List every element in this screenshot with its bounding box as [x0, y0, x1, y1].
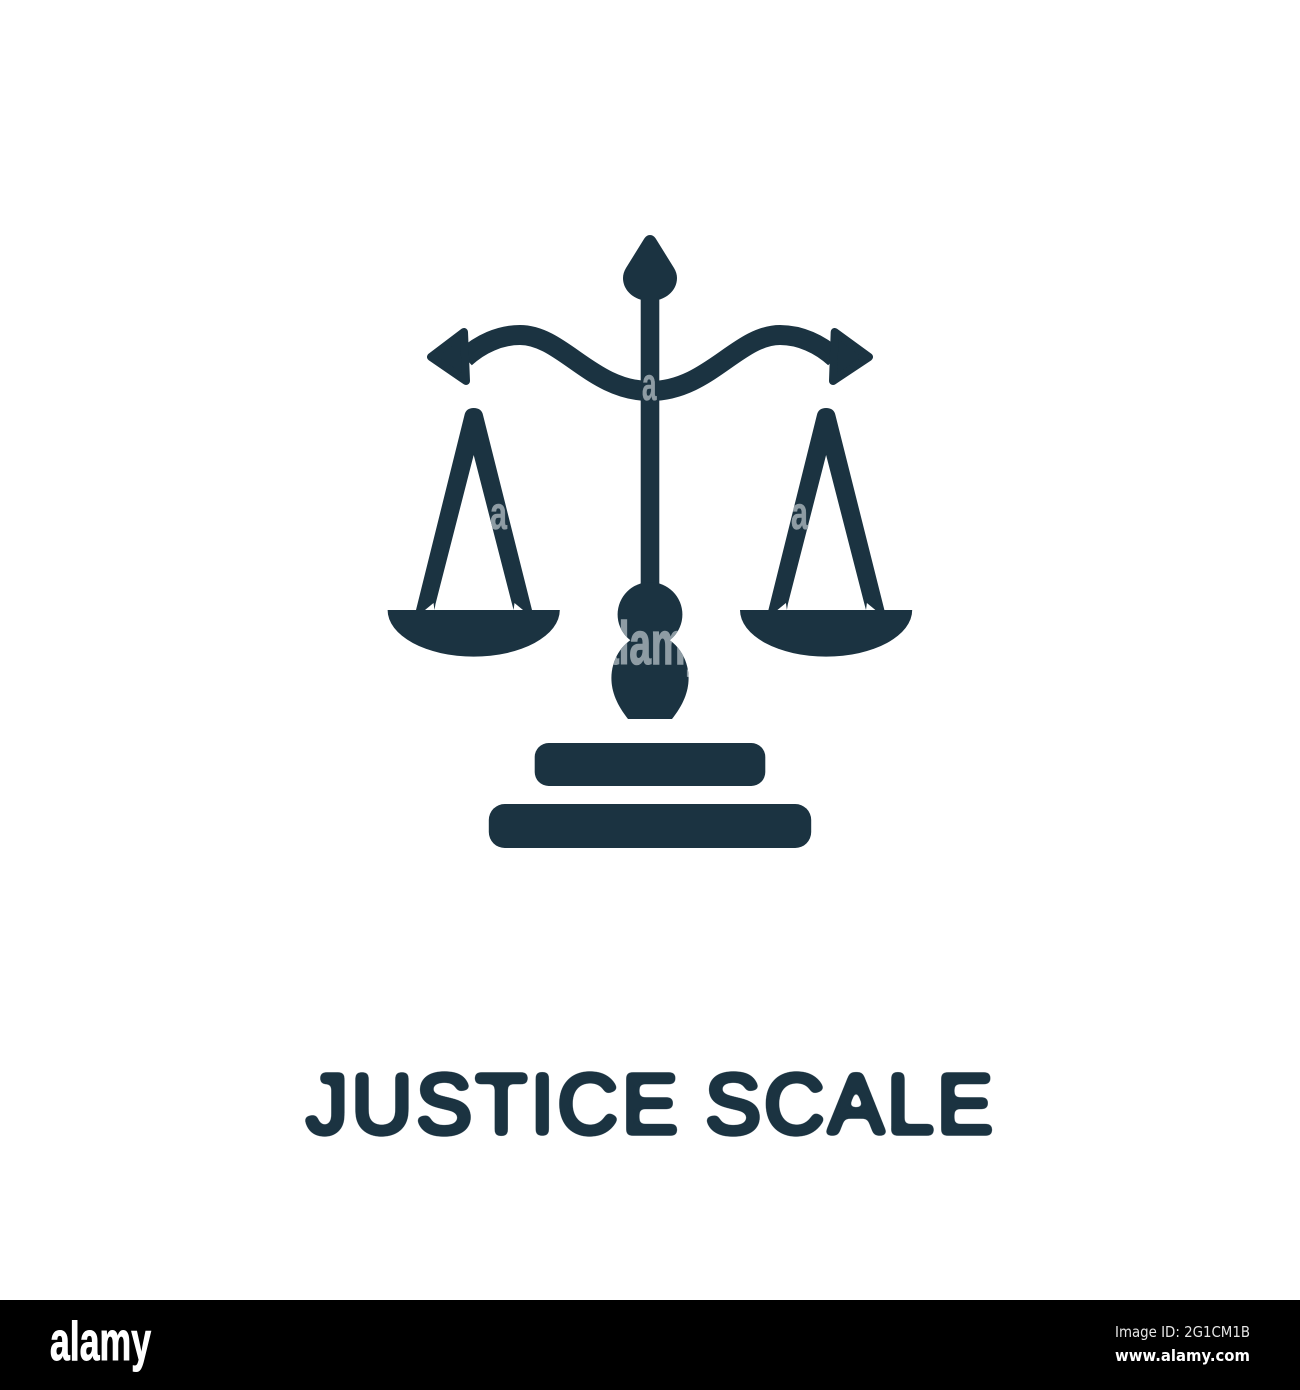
watermark letters over icon: [490, 358, 808, 677]
icon: lower base step: [489, 804, 811, 848]
watermark letters over icon: a: [791, 487, 808, 539]
footer bar: [0, 1300, 1300, 1390]
watermark letters over icon: alamy: [597, 610, 707, 677]
icon: curved balance beam: [465, 335, 835, 391]
title: [306, 1057, 993, 1151]
footer logo: alamy: [50, 1310, 151, 1372]
title: JUSTICE: [306, 1057, 678, 1151]
watermark letters over icon: a: [642, 358, 657, 410]
icon: right scale pan with hanger: [740, 408, 912, 657]
icon: central pole with spear tip: [623, 235, 677, 590]
footer image id: Image ID: 2G1CM1B: [1115, 1323, 1250, 1341]
icon: pole base knob: [611, 582, 689, 719]
icon: left scale pan with hanger: [388, 408, 560, 657]
arrow: right beam end: [833, 332, 869, 381]
arrow: left beam end: [431, 332, 466, 381]
watermark letters over icon: a: [490, 487, 507, 539]
icon: justice scale: [388, 235, 912, 848]
title: SCALE: [705, 1057, 993, 1151]
icon: upper base step: [535, 743, 765, 786]
footer website: www.alamy.com: [1115, 1346, 1250, 1365]
